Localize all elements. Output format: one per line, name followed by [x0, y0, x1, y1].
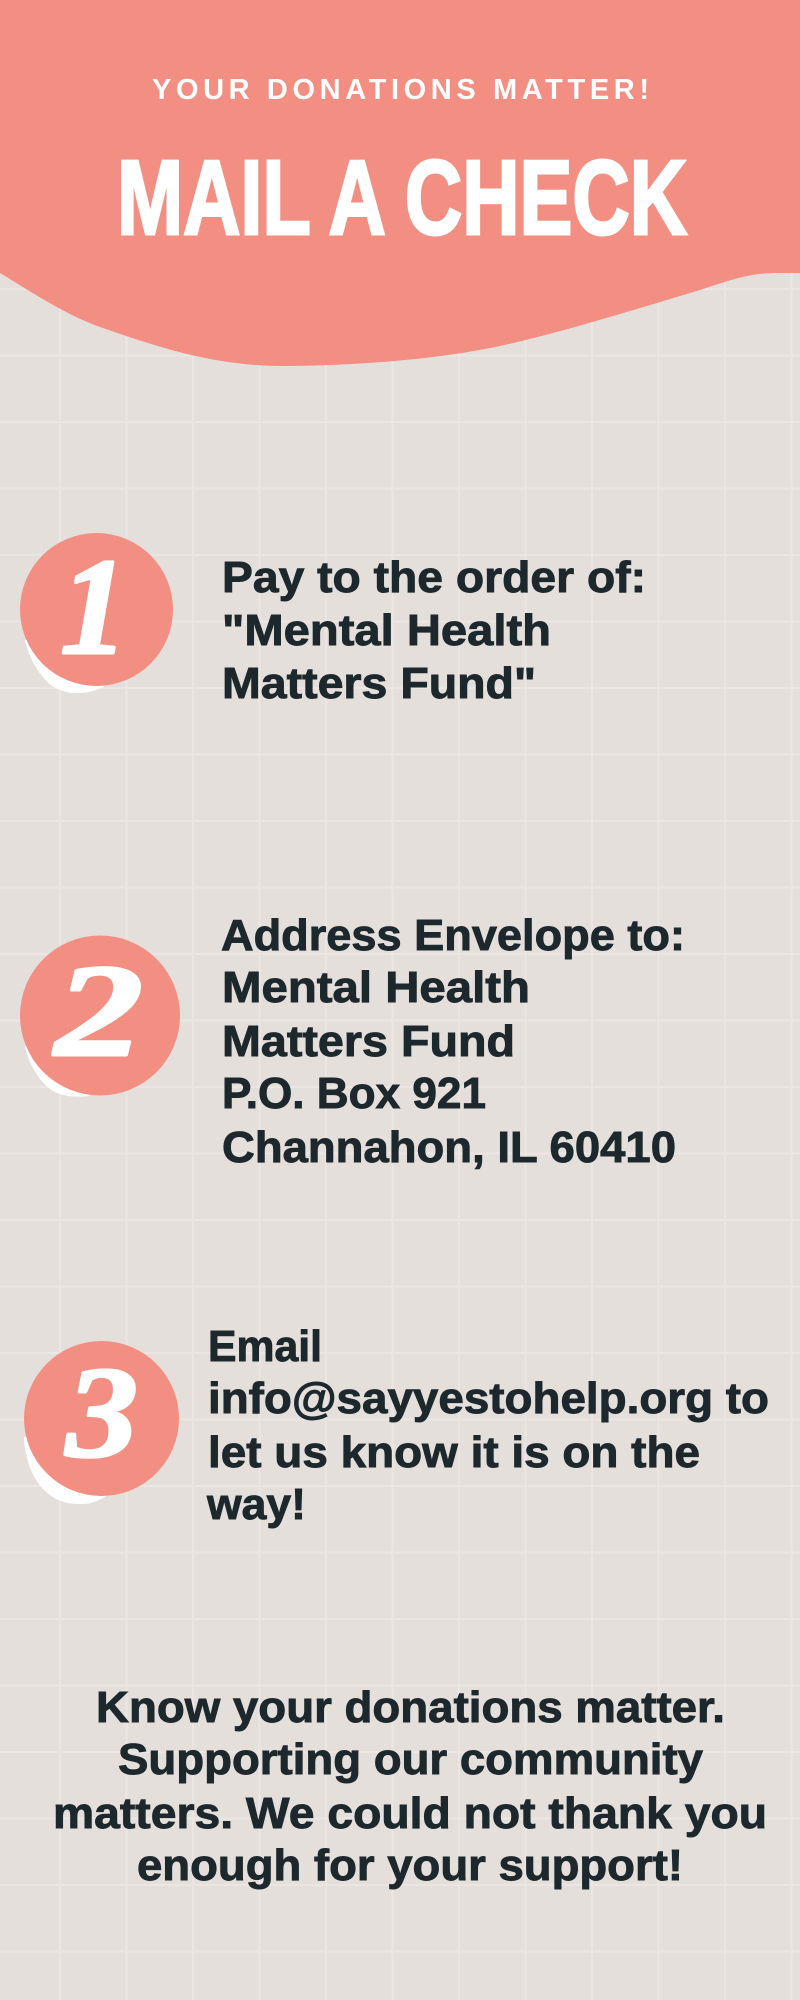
step 1 — [20, 530, 646, 708]
step 2 text: Mental Health — [222, 963, 530, 1012]
closing message — [53, 1683, 767, 1890]
badge shadow 3 — [24, 1430, 108, 1504]
number 3: 3 — [64, 1341, 138, 1485]
step 3 text: way! — [206, 1480, 306, 1529]
closing message: enough for your support! — [137, 1841, 683, 1890]
badge shadow 2 — [25, 1040, 90, 1097]
number 2: 2 — [52, 937, 143, 1084]
step 1 text — [222, 553, 646, 708]
step 3 — [24, 1322, 769, 1529]
header wave banner — [0, 0, 800, 366]
step 1 text: Matters Fund" — [222, 659, 536, 708]
step 2 text: P.O. Box 921 — [222, 1069, 486, 1118]
badge circle 3 — [24, 1341, 179, 1496]
step 2 text — [221, 911, 685, 1172]
badge shadow 1 — [25, 620, 104, 693]
step 1 text: "Mental Health — [222, 606, 551, 655]
step 3 text — [206, 1322, 769, 1529]
eyebrow heading: YOUR DONATIONS MATTER! — [152, 74, 649, 106]
step 2 — [20, 911, 685, 1172]
number 1: 1 — [60, 530, 128, 683]
closing message: Know your donations matter. — [96, 1683, 725, 1732]
badge circle 2 — [20, 936, 180, 1096]
step 2 text: Channahon, IL 60410 — [222, 1123, 676, 1172]
step 3 text: let us know it is on the — [208, 1428, 700, 1477]
closing message: Supporting our community — [118, 1735, 704, 1784]
step 2 text: Matters Fund — [222, 1017, 515, 1066]
step 2 text: Address Envelope to: — [221, 911, 685, 960]
closing message: matters. We could not thank you — [53, 1789, 767, 1838]
step 3 text: Email — [208, 1322, 322, 1371]
step 3 text: info@sayyestohelp.org to — [208, 1374, 769, 1423]
step 1 text: Pay to the order of: — [222, 553, 646, 602]
badge circle 1 — [20, 533, 173, 686]
